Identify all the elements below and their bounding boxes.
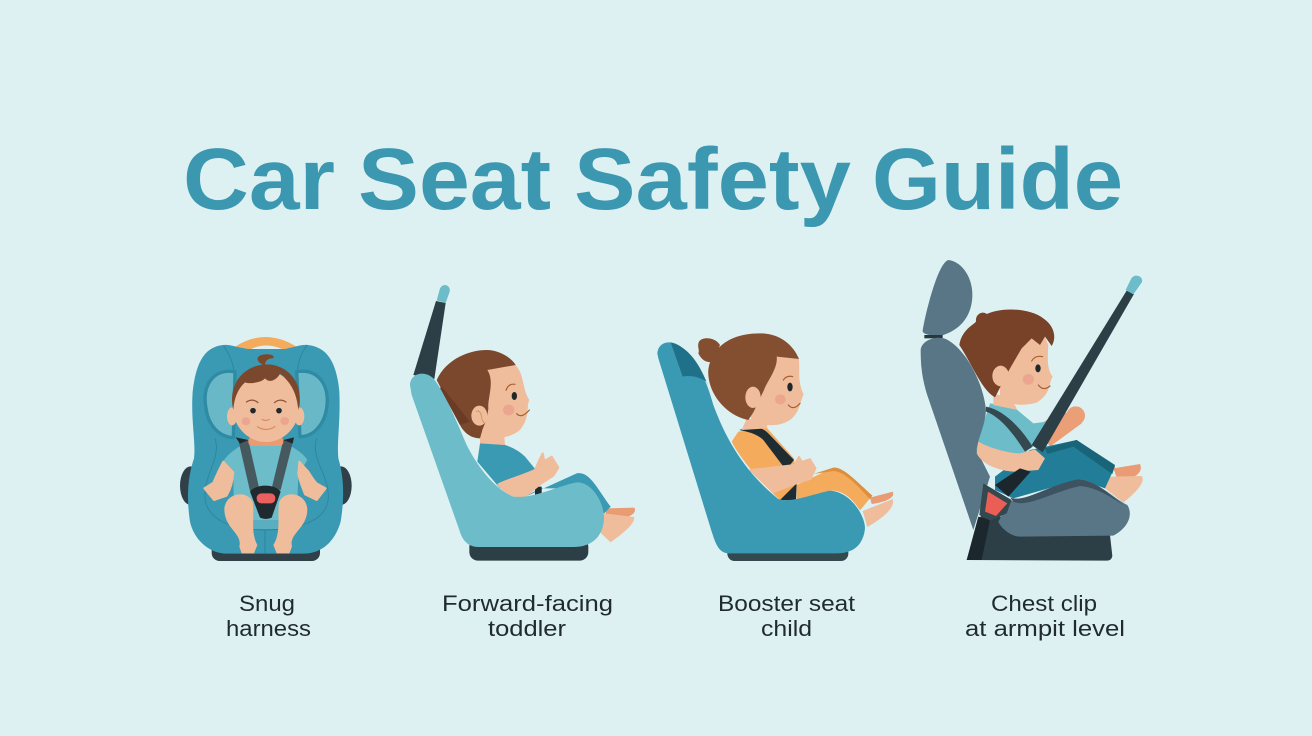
child feet — [870, 492, 893, 504]
title: Guide — [872, 131, 1123, 228]
illustration: booster seat child — [657, 333, 893, 561]
label: forward-facing toddler: Forward-facing — [442, 591, 613, 616]
booster cushion — [998, 479, 1130, 537]
child near arm — [977, 442, 1045, 472]
car seat back — [921, 338, 990, 530]
child head — [959, 309, 1054, 410]
toddler leg — [523, 473, 611, 514]
baby head — [227, 354, 304, 446]
seat headrest shade — [671, 342, 711, 393]
arms and hands — [204, 462, 326, 500]
headrest pads — [205, 371, 235, 438]
chest buckle — [250, 486, 281, 519]
label: chest clip at armpit level: at armpit level — [965, 616, 1125, 641]
baby onesie — [223, 442, 307, 522]
child far foot — [1113, 464, 1141, 482]
child shirt — [732, 428, 797, 500]
child far arm — [1037, 406, 1085, 447]
seat shell — [410, 374, 604, 547]
toddler feet — [605, 508, 635, 520]
toddler arm — [498, 453, 558, 498]
toddler shirt — [477, 442, 536, 488]
toddler head — [437, 350, 529, 445]
shoulder strap — [986, 407, 1033, 452]
label: booster seat child — [718, 591, 855, 641]
car headrest — [923, 260, 972, 336]
label: chest clip at armpit level: Chest clip — [991, 591, 1097, 616]
lower cushion — [242, 520, 290, 529]
illustration: chest clip at armpit level — [921, 260, 1143, 561]
lap belt — [995, 468, 1031, 497]
title: Car — [183, 131, 335, 228]
label: forward-facing toddler: toddler — [488, 616, 566, 641]
side wings — [180, 466, 352, 561]
label: forward-facing toddler — [442, 591, 613, 641]
label: booster seat child: Booster seat — [718, 591, 855, 616]
title: Safety — [574, 131, 851, 228]
seat base — [469, 538, 588, 561]
child leg — [797, 468, 872, 510]
belt guide — [979, 483, 1012, 521]
belt tip — [1126, 276, 1142, 294]
seat shell — [188, 345, 343, 554]
seat base — [727, 542, 848, 561]
child trousers — [995, 440, 1115, 498]
red clip — [985, 492, 1007, 516]
title: Seat — [358, 131, 551, 228]
title — [183, 131, 1123, 228]
illustration: forward-facing toddler seat — [410, 285, 635, 561]
label: snug harness — [226, 591, 311, 641]
child arm — [750, 457, 816, 492]
legs and feet — [224, 494, 307, 553]
strap tip — [437, 285, 450, 303]
illustration: infant in harness seat — [180, 337, 352, 561]
seat strap — [413, 301, 446, 379]
shoulder clips — [236, 437, 294, 444]
child head — [698, 333, 804, 430]
label: booster seat child: child — [761, 616, 812, 641]
child shirt — [977, 403, 1047, 463]
seat carry handle — [236, 337, 296, 351]
label: chest clip at armpit level — [965, 591, 1125, 641]
shoulder belt — [739, 427, 794, 470]
harness straps — [238, 440, 293, 491]
car seat base — [967, 513, 1112, 561]
label: snug harness: Snug — [239, 591, 295, 616]
label: snug harness: harness — [226, 616, 311, 641]
labels — [226, 591, 1125, 641]
diagonal seat belt — [1032, 291, 1134, 452]
seat shell — [657, 342, 865, 553]
